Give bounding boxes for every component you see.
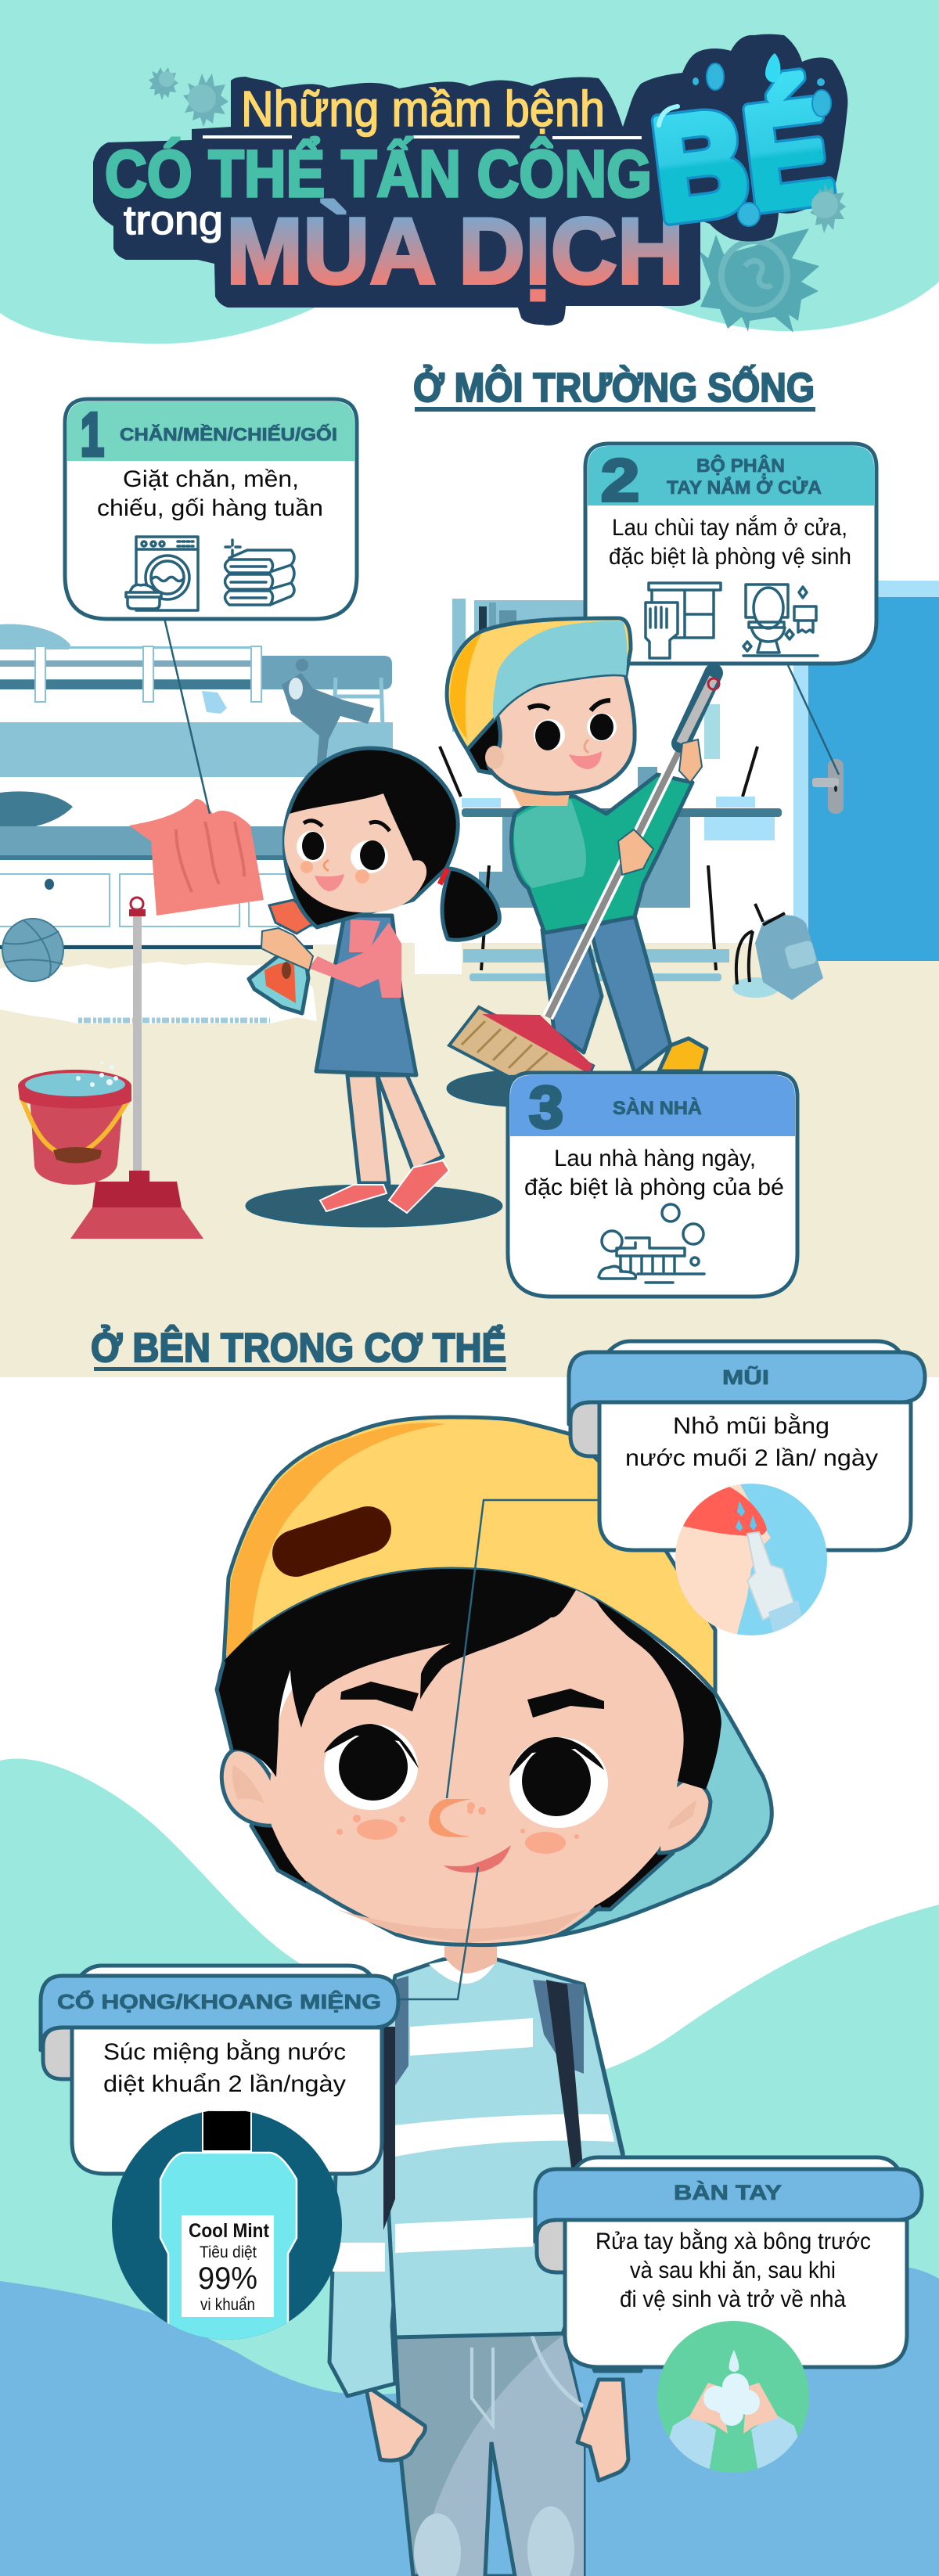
eyebrows <box>340 1682 604 1718</box>
dustpan and pole <box>70 898 203 1239</box>
card 3 title: SÀN NHÀ <box>613 1097 702 1119</box>
card 2 text: đặc biệt là phòng vệ sinh <box>609 544 851 570</box>
nose callout header <box>569 1352 925 1424</box>
hands callout text <box>595 2229 871 2312</box>
basketball <box>2 919 63 981</box>
boy ear <box>485 746 504 769</box>
spray bottle <box>249 900 318 1013</box>
callout: hands <box>535 2157 922 2477</box>
card 3 text: Lau nhà hàng ngày, <box>554 1146 756 1171</box>
hair <box>217 1569 576 1777</box>
cap strap <box>296 1530 368 1553</box>
nose <box>429 1799 472 1837</box>
boy character with broom <box>447 618 719 1106</box>
note paper <box>202 691 227 714</box>
callout: nose <box>447 1341 925 1798</box>
girl hair tie <box>440 869 448 884</box>
virus: small left <box>149 67 228 127</box>
card 3 header <box>510 1075 795 1136</box>
nose callout tab <box>608 1341 900 1352</box>
mouth <box>444 1845 511 1873</box>
hands callout header <box>535 2169 922 2242</box>
card 2 header <box>588 446 874 505</box>
boy floor shadow <box>448 1070 617 1106</box>
virus: large <box>699 228 819 333</box>
hands callout title: BÀN TAY <box>674 2180 782 2204</box>
card 3: floor <box>508 1073 797 1297</box>
room scene <box>0 581 939 1377</box>
card 2 number: 2 <box>601 448 639 514</box>
card 2: door handles <box>585 444 876 775</box>
study wall <box>415 599 782 981</box>
girl legs <box>347 1075 389 1183</box>
leader line card 2 <box>787 664 839 775</box>
icon: folded towels <box>225 540 294 605</box>
girl eyes <box>297 831 388 873</box>
shirt white stripes <box>333 2018 614 2272</box>
nose callout title: MŨI <box>722 1365 769 1389</box>
card 3 number: 3 <box>529 1074 563 1141</box>
card 2 title <box>667 455 822 498</box>
leader line throat <box>398 1867 478 1999</box>
card 3 frame <box>508 1073 797 1297</box>
card 1 number: 1 <box>81 400 104 469</box>
bottle label text: Tiêu diệt <box>200 2243 257 2261</box>
left eye <box>324 1724 419 1810</box>
card 2 text <box>609 515 851 570</box>
card 2 title: BỘ PHẬN <box>696 455 785 477</box>
broom head <box>449 1007 593 1077</box>
floor <box>0 943 939 1377</box>
card 1: bedding <box>65 399 357 814</box>
cleaning cloth <box>129 799 264 916</box>
card 3 text <box>524 1146 784 1200</box>
ears <box>221 1750 711 1853</box>
icon: scrub brush <box>599 1204 704 1283</box>
bottle label text: 99% <box>198 2261 257 2296</box>
throat callout tab <box>81 1966 371 1976</box>
throat callout grey fold <box>43 2027 73 2079</box>
throat callout title: CỔ HỌNG/KHOANG MIỆNG <box>57 1990 381 2013</box>
throat callout text: diệt khuẩn 2 lần/ngày <box>103 2071 346 2097</box>
girl character <box>246 748 502 1226</box>
background: lower blue wave <box>0 2267 939 2576</box>
rug <box>0 962 317 1024</box>
card 2 text: Lau chùi tay nắm ở cửa, <box>612 515 847 541</box>
throat callout body <box>72 2027 382 2174</box>
card 1 text <box>97 466 323 521</box>
girl face <box>284 793 426 912</box>
boy hair <box>467 659 626 775</box>
card 1 frame <box>65 399 357 619</box>
door <box>793 581 939 961</box>
title dark backdrop <box>93 34 847 326</box>
bottle label text <box>189 2220 270 2314</box>
card 2 frame <box>585 444 876 664</box>
right eye <box>509 1737 608 1828</box>
boy hands <box>618 739 702 875</box>
nose callout body <box>599 1402 911 1550</box>
card 1 text: Giặt chăn, mền, <box>123 466 299 492</box>
boy hands <box>365 2380 628 2481</box>
icon: nasal spray <box>673 1483 829 1639</box>
callout: throat and mouth <box>41 1867 478 2348</box>
icon: washing hands <box>656 2319 812 2477</box>
neck <box>444 1925 497 1973</box>
door handle <box>812 759 844 814</box>
title line: Mùa dịch: MÙA DỊCH <box>226 199 684 304</box>
cheeks and freckles <box>336 1802 579 1854</box>
throat callout text: Súc miệng bằng nước <box>103 2039 346 2065</box>
girl shoes <box>320 1185 387 1211</box>
girl dress <box>316 916 416 1075</box>
boy head <box>447 618 635 806</box>
girl eyebrows <box>304 821 390 831</box>
leader line card 1 <box>164 618 210 814</box>
icon: wiping cabinet <box>646 583 721 658</box>
hair sliver under jaw <box>251 1800 673 1909</box>
hands callout text: Rửa tay bằng xà bông trước <box>595 2229 871 2254</box>
throat callout text <box>103 2039 346 2097</box>
bottle label text: Cool Mint <box>189 2220 270 2242</box>
backpack straps <box>383 1976 584 2230</box>
leader line nose <box>447 1500 601 1798</box>
hands callout grey fold <box>537 2220 566 2272</box>
girl ponytail <box>442 869 499 940</box>
card 1 header <box>67 401 354 461</box>
hands callout tab <box>575 2157 898 2169</box>
backpack <box>732 904 823 1000</box>
nose callout text: nước muối 2 lần/ ngày <box>625 1445 878 1471</box>
boy cap <box>447 618 631 750</box>
card 2 title: TAY NẮM Ở CỬA <box>667 476 822 498</box>
boy neck <box>509 783 571 806</box>
boy eyes <box>534 713 617 750</box>
cap <box>224 1417 715 1693</box>
large boy character <box>217 1417 772 2576</box>
title word: Bé bubble letters: BÉ <box>645 69 840 250</box>
nose callout text <box>625 1413 878 1471</box>
boy shirt <box>511 775 693 933</box>
cap back brim <box>556 1693 772 1936</box>
title word: trong: trong <box>124 198 223 243</box>
boy face <box>488 665 635 793</box>
bunk bed <box>0 624 393 949</box>
girl mouth and cheeks <box>300 860 369 891</box>
boy eyebrows <box>528 700 610 711</box>
face <box>269 1590 684 1944</box>
card 1 title: CHĂN/MỀN/CHIẾU/GỐI <box>120 423 337 444</box>
boy trousers <box>542 926 602 1052</box>
title word: Bé bubble letters: BÉ <box>645 69 840 250</box>
bottle label text: vi khuẩn <box>200 2296 255 2314</box>
virus: small right <box>810 183 846 233</box>
teddy bear toy <box>282 659 374 783</box>
broom stick <box>548 673 719 1017</box>
section heading: Ở môi trường sống: Ở MÔI TRƯỜNG SỐNG <box>413 365 815 411</box>
girl floor shadow <box>246 1185 502 1226</box>
section heading: Ở bên trong cơ thể: Ở BÊN TRONG CƠ THỂ <box>91 1325 506 1371</box>
background: top mint banner <box>0 0 939 344</box>
icon: washing machine <box>126 537 198 610</box>
card 3 text: đặc biệt là phòng của bé <box>524 1175 784 1200</box>
title rule lines <box>203 135 642 139</box>
title line: Có thể tấn công: CÓ THỂ TẤN CÔNG <box>105 137 652 210</box>
girl hand <box>261 928 313 970</box>
title line: Những mầm bệnh: Những mầm bệnh <box>241 81 605 137</box>
girl hair <box>284 748 458 927</box>
hands callout text: đi vệ sinh và trở về nhà <box>620 2286 846 2312</box>
icon: toilet <box>743 585 818 656</box>
boy sleeves and shirt <box>329 1956 641 2396</box>
boy nose and mouth <box>569 739 602 769</box>
mouthwash bottle illustration <box>112 2110 342 2348</box>
girl sleeve <box>308 923 401 998</box>
card 1 text: chiếu, gối hàng tuần <box>97 495 323 521</box>
hands callout body <box>565 2220 907 2367</box>
throat callout header <box>41 1976 398 2050</box>
hands callout text: và sau khi ăn, sau khi <box>630 2258 836 2283</box>
title block <box>93 34 847 333</box>
nose callout grey fold <box>570 1402 601 1456</box>
jaw outline <box>306 1883 601 1945</box>
background: lower mint waves <box>0 1758 939 2576</box>
bucket <box>18 1061 131 1185</box>
nose callout text: Nhỏ mũi bằng <box>673 1413 829 1439</box>
boy trousers <box>395 2328 584 2576</box>
boy shoe <box>659 1038 707 1071</box>
